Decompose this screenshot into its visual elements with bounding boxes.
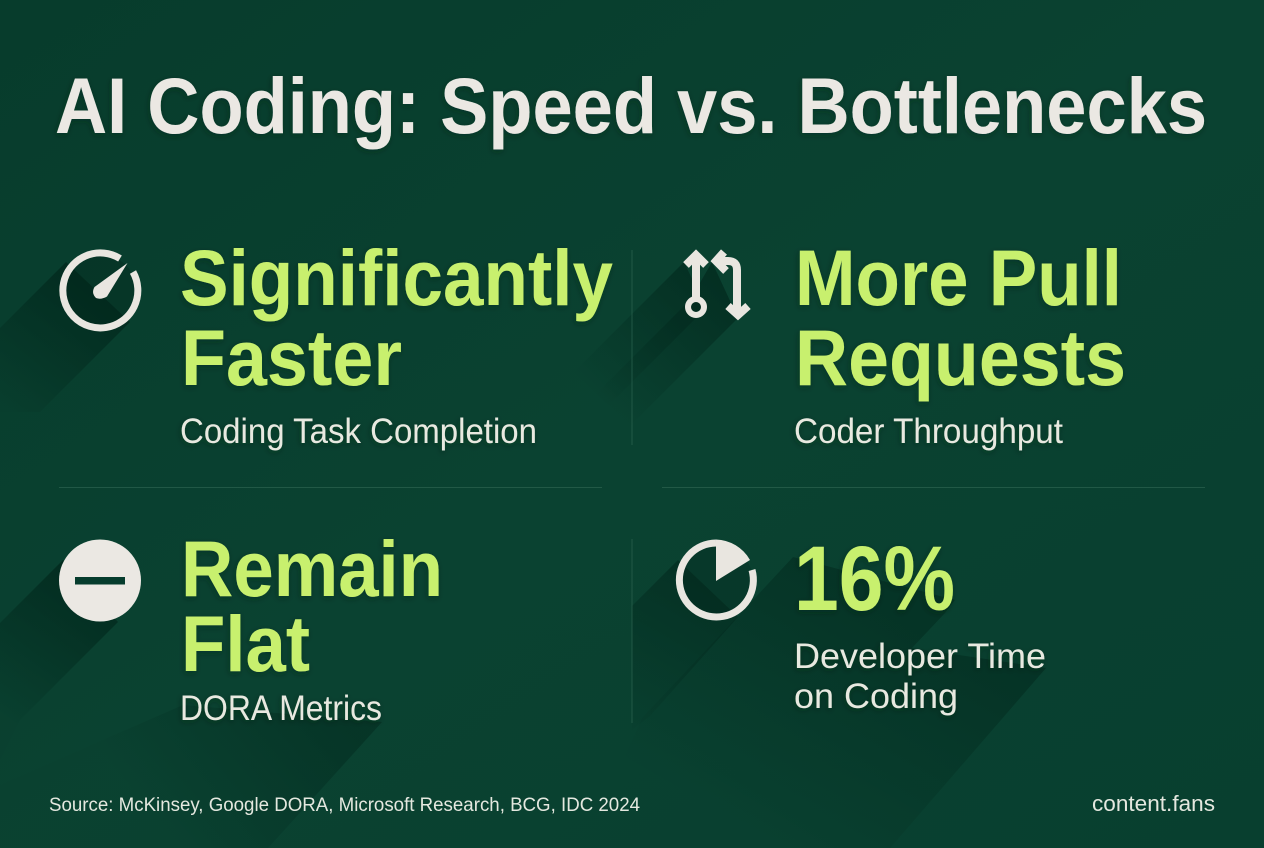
heading: remain: Remain bbox=[181, 524, 443, 613]
heading line: faster: Faster bbox=[181, 313, 402, 402]
icon: speedometer gauge bbox=[63, 253, 138, 328]
label: developer time: Developer Time bbox=[794, 637, 1046, 676]
label: coding task completion: Coding Task Completion bbox=[180, 412, 537, 451]
panel: developer time on coding bbox=[678, 528, 1046, 716]
label: dora metrics: DORA Metrics bbox=[180, 689, 382, 728]
heading: significantly: Significantly bbox=[180, 233, 613, 322]
icon: pull request arrows bbox=[686, 252, 748, 315]
source note: Source: McKinsey, Google DORA, Microsoft Research, BCG, IDC 2024 bbox=[49, 795, 640, 816]
panel: coding task completion bbox=[63, 233, 613, 451]
heading line: requests: Requests bbox=[795, 313, 1126, 402]
label: on coding: on Coding bbox=[794, 677, 958, 716]
icon: pie chart bbox=[678, 540, 753, 617]
stat: 16 percent: 16% bbox=[794, 528, 955, 630]
panel: dora metrics bbox=[59, 524, 443, 728]
label: coder throughput: Coder Throughput bbox=[794, 412, 1063, 451]
heading: more pull: More Pull bbox=[795, 233, 1122, 322]
panel: coder throughput bbox=[686, 233, 1126, 451]
brand: content.fans: content.fans bbox=[1092, 791, 1215, 816]
icon: minus circle bbox=[59, 540, 141, 622]
long shadows bbox=[0, 262, 1046, 848]
heading line: flat: Flat bbox=[181, 599, 310, 688]
